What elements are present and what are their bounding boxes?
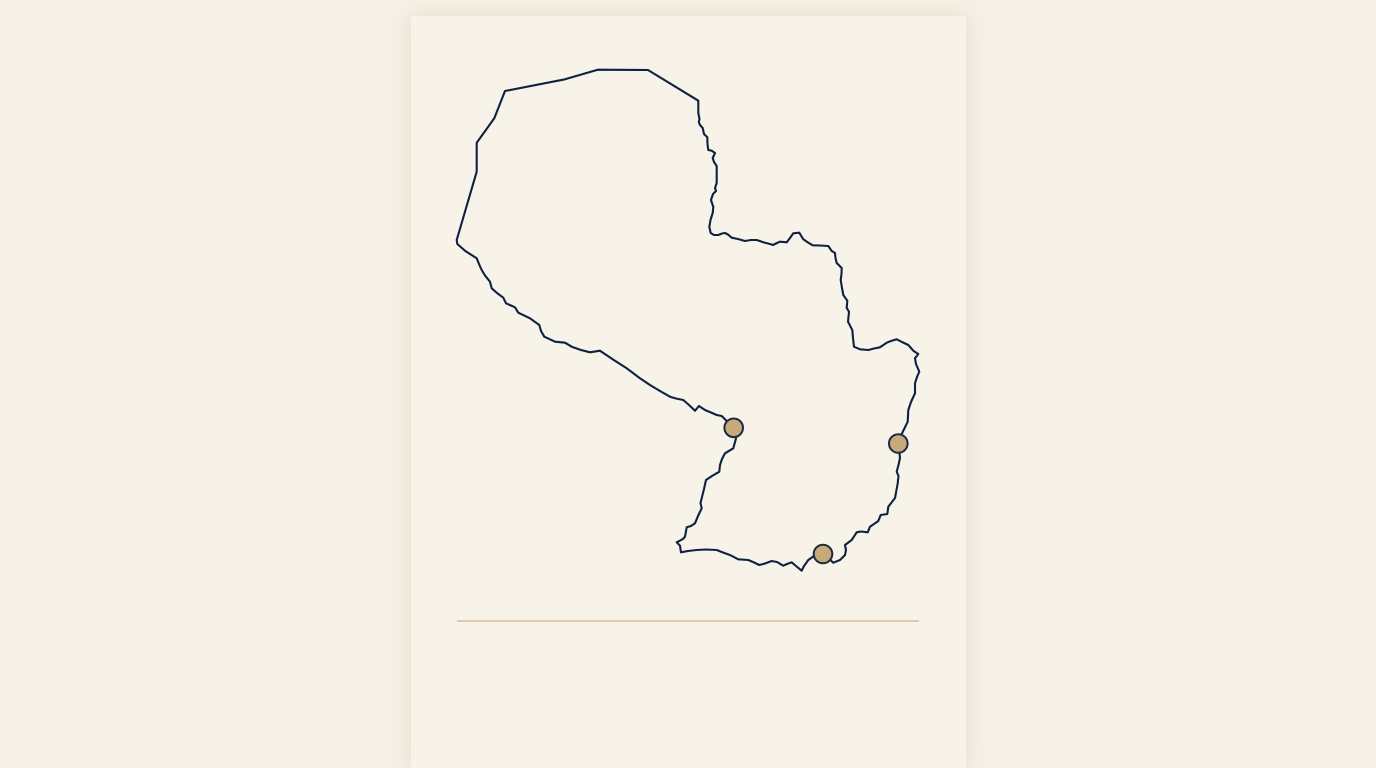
map outline bbox=[457, 70, 919, 571]
marker: south bbox=[814, 545, 832, 563]
marker: east bbox=[889, 434, 908, 453]
marker: west bbox=[724, 418, 743, 437]
panel: paper card bbox=[411, 16, 966, 768]
